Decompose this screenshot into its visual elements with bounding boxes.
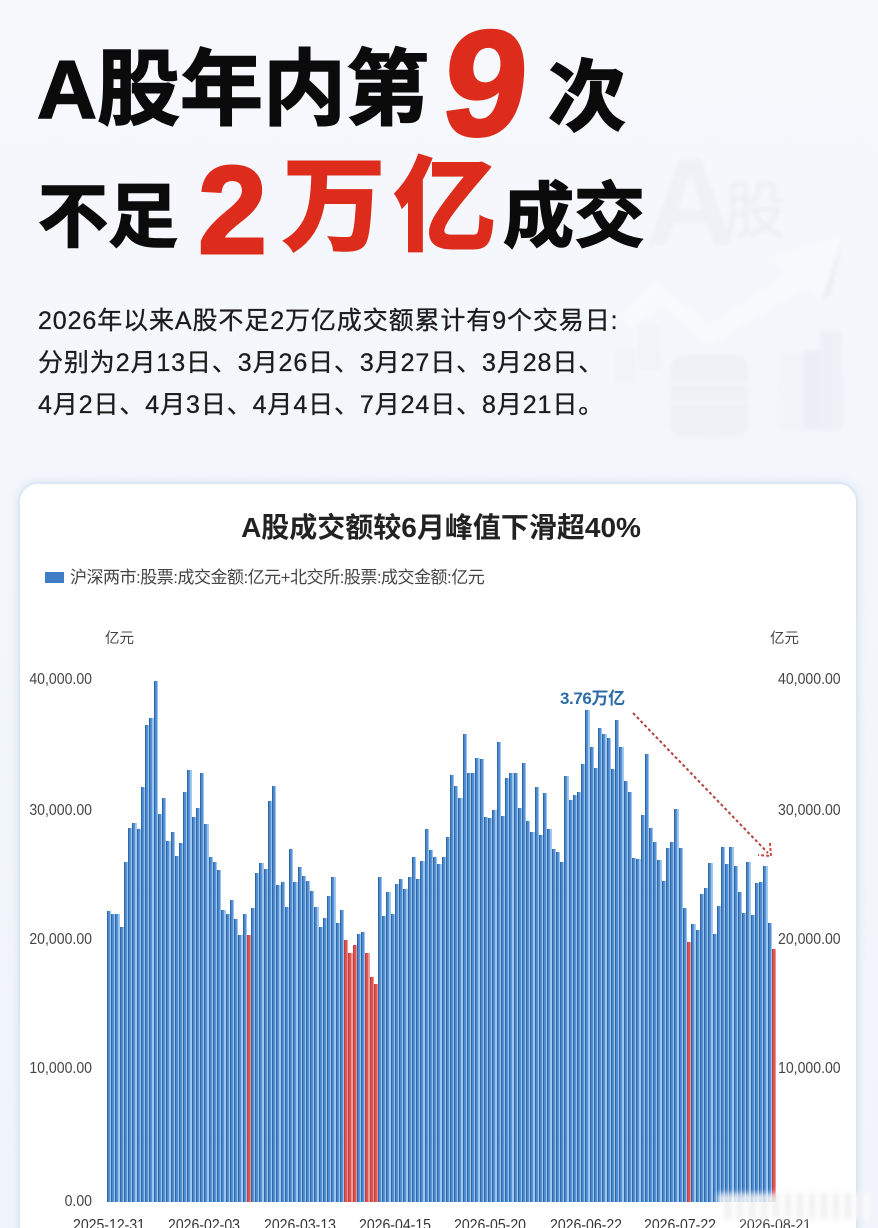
left y axis labels	[29, 671, 92, 1210]
right y axis labels: 40,000.00	[778, 671, 841, 688]
x axis labels	[73, 1217, 811, 1228]
big red 2万亿	[198, 142, 505, 280]
legend swatch	[45, 572, 64, 583]
background decoration: faded A股, arrow, coins, bars: A	[645, 133, 735, 272]
title line 2	[38, 142, 645, 280]
intro paragraph: 4月2日、4月3日、4月4日、7月24日、8月21日。	[38, 391, 604, 419]
left y axis labels: 30,000.00	[29, 802, 92, 819]
right y axis labels: 30,000.00	[778, 802, 841, 819]
left axis unit: 亿元	[105, 631, 134, 647]
legend text: 沪深两市:股票:成交金额:亿元+北交所:股票:成交金额:亿元	[70, 568, 484, 587]
watermark	[718, 1193, 868, 1219]
title text: 次: 次	[548, 53, 626, 141]
right y axis labels: 20,000.00	[778, 931, 841, 948]
left y axis labels: 20,000.00	[29, 931, 92, 948]
left y axis labels: 40,000.00	[29, 671, 92, 688]
title text: 不足: 不足	[38, 178, 178, 256]
bar chart	[107, 681, 776, 1202]
chart title: A股成交额较6月峰值下滑超40%	[241, 512, 641, 543]
big red number 9: 9	[435, 0, 536, 167]
legend	[45, 568, 484, 587]
panel: chart card	[18, 482, 858, 1228]
title line 1	[37, 0, 626, 167]
left y axis labels: 0.00	[65, 1193, 92, 1210]
title text: 成交: 成交	[503, 178, 645, 257]
big red number 2: 2	[198, 142, 267, 280]
big red text 万亿: 万亿	[283, 150, 505, 264]
background decoration: faded A股, arrow, coins, bars	[645, 133, 832, 427]
intro paragraph	[38, 307, 618, 419]
right y axis labels	[778, 671, 841, 1077]
background decoration: faded A股, arrow, coins, bars: 股	[724, 160, 786, 250]
left y axis labels: 10,000.00	[29, 1060, 92, 1077]
callout: peak value 3.76万亿: 3.76万亿	[560, 689, 625, 708]
right axis unit: 亿元	[770, 631, 799, 647]
intro paragraph: 2026年以来A股不足2万亿成交额累计有9个交易日:	[38, 307, 618, 335]
intro paragraph: 分别为2月13日、3月26日、3月27日、3月28日、	[38, 349, 604, 377]
right y axis labels: 10,000.00	[778, 1060, 841, 1077]
title text: A股年内第: A股年内第	[37, 43, 429, 136]
arrow: decline from peak	[632, 712, 772, 857]
